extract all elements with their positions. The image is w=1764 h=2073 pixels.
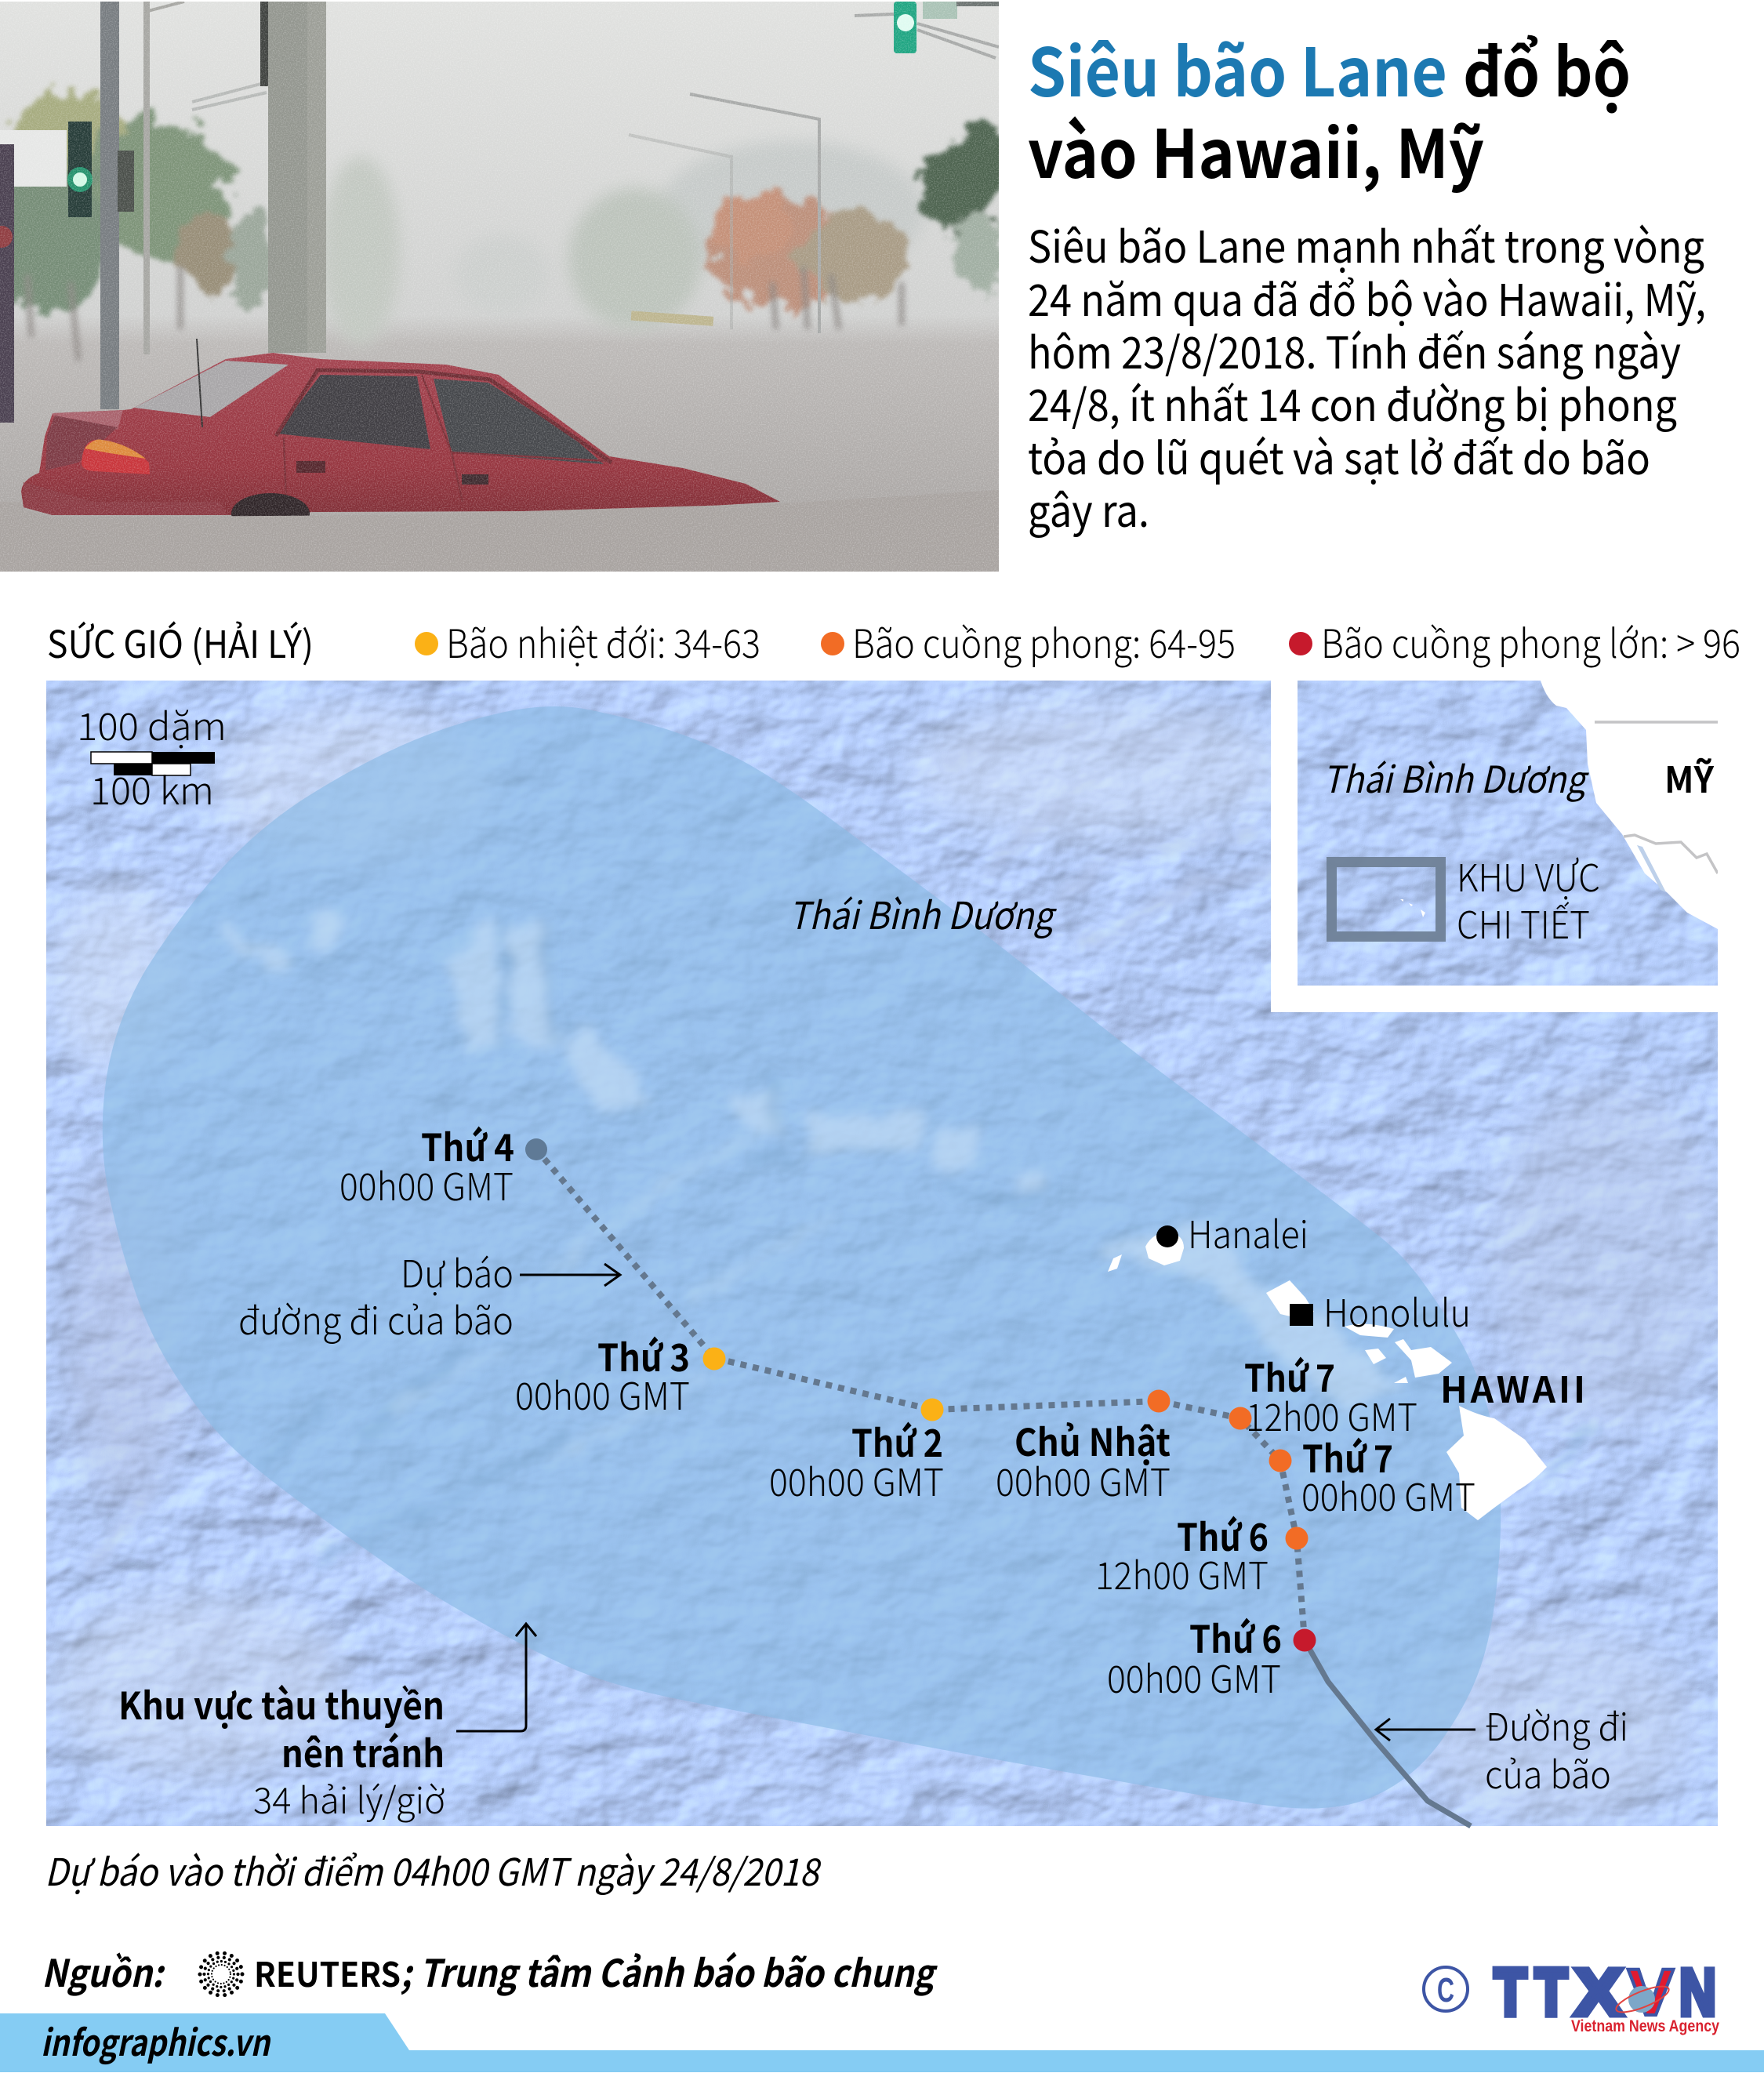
icon: copyright (1424, 1967, 1468, 2011)
wordmark letters: V (1628, 1955, 1674, 2029)
tree trunks (27, 267, 902, 361)
track point: Thứ 4 00h00 GMT (339, 1117, 547, 1211)
track point: Thứ 4 00h00 GMT: 00h00 GMT (339, 1156, 514, 1211)
track point: Thứ 7 12h00 GMT: 12h00 GMT (1246, 1387, 1417, 1442)
source line: ; Trung tâm Cảnh báo bão chung (401, 1943, 938, 1998)
tail light (82, 440, 150, 474)
rain grain (0, 2, 999, 572)
forecast time note: Dự báo vào thời điểm 04h00 GMT ngày 24/8/2018 (45, 1842, 822, 1897)
panel: locator inset map (1282, 665, 1733, 1001)
source line (42, 1943, 938, 1998)
title: vào Hawaii, Mỹ (1028, 101, 1484, 198)
intro text block: 24/8, ít nhất 14 con đường bị phong (1028, 371, 1677, 434)
street lights (192, 14, 999, 333)
callout: storm track: Đường đi (1485, 1697, 1628, 1752)
inset label: USA: MỸ (1664, 752, 1714, 804)
thin poles (143, 2, 150, 354)
intro text block: gây ra. (1028, 477, 1149, 540)
source line: Nguồn: (42, 1943, 165, 1998)
orange tree (710, 192, 909, 306)
callout: storm track: của bão (1485, 1744, 1611, 1799)
intro text block: tỏa do lũ quét và sạt lở đất do bão (1028, 424, 1650, 488)
callout: area ships should avoid (118, 1624, 536, 1824)
scale bar (77, 696, 227, 815)
ridge lines outside the cone (78, 706, 1270, 1701)
track point: Thứ 6 12h00 GMT (1095, 1507, 1308, 1600)
footer bar (0, 2013, 1764, 2072)
place: Hanalei: Hanalei (1188, 1204, 1308, 1259)
callout: forecast track: Dự báo (401, 1243, 514, 1298)
inset label: Pacific: Thái Bình Dương (1323, 750, 1589, 804)
main concrete pole (268, 2, 326, 353)
legend: wind strength (47, 613, 1740, 670)
dark tree at right (917, 125, 1007, 290)
Hawaiian islands (1108, 1233, 1547, 1520)
track point: Thứ 7 12h00 GMT (1229, 1348, 1417, 1442)
callout: area ships should avoid: 34 hải lý/giờ (253, 1773, 445, 1824)
wordmark letters (1494, 1955, 1716, 2029)
car (21, 339, 780, 534)
car windows (134, 361, 289, 417)
track point: Thứ 3 00h00 GMT: 00h00 GMT (515, 1366, 690, 1421)
callout: forecast track (238, 1243, 620, 1345)
left traffic light (68, 122, 92, 217)
legend item: typhoon: Bão cuồng phong: 64-95 (852, 613, 1236, 670)
wordmark letters: N (1679, 1955, 1716, 2029)
scale bar: 100 km (90, 761, 214, 815)
track point: Thứ 3 00h00 GMT (515, 1327, 726, 1421)
wheel (231, 493, 310, 534)
legend item: tropical storm: Bão nhiệt đới: 34-63 (446, 613, 760, 670)
seamount shallows and trenches (212, 909, 1596, 1560)
right traffic light (894, 2, 916, 53)
ocean relief background (31, 665, 1733, 1842)
label: Thái Bình Dương: Thái Bình Dương (789, 885, 1057, 940)
track point: Thứ 7 00h00 GMT: Thứ 7 (1302, 1429, 1393, 1483)
track point: Thứ 7 00h00 GMT: 00h00 GMT (1301, 1467, 1475, 1522)
Gulf of California (1637, 845, 1666, 892)
inset label: detail area: KHU VỰC (1457, 848, 1600, 902)
track point: Thứ 4 00h00 GMT: Thứ 4 (421, 1117, 514, 1172)
scale bar: 100 dặm (77, 696, 227, 751)
antenna (197, 339, 202, 427)
icon: globe (1613, 1981, 1671, 2017)
door handles (296, 461, 325, 473)
source line: REUTERS (254, 1948, 401, 1997)
track: forecast dotted line (536, 1149, 1305, 1640)
track point: Chủ Nhật 00h00 GMT: 00h00 GMT (996, 1452, 1171, 1507)
intro text block: hôm 23/8/2018. Tính đến sáng ngày (1028, 318, 1681, 382)
borders (1595, 722, 1718, 873)
place: Honolulu: Honolulu (1323, 1283, 1471, 1338)
panel: main map (31, 665, 1733, 1842)
callout: area ships should avoid: Khu vực tàu thuyền (118, 1675, 445, 1730)
intro text block: 24 năm qua đã đổ bộ vào Hawaii, Mỹ, (1028, 266, 1706, 329)
inset islands (1400, 899, 1425, 917)
detail area rectangle (1331, 862, 1441, 936)
track point: Thứ 2 00h00 GMT (769, 1399, 944, 1507)
logo: TTXVN: Vietnam News Agency (1571, 2017, 1719, 2035)
track point: Thứ 6 00h00 GMT (1107, 1609, 1316, 1704)
inset label: detail area: CHI TIẾT (1457, 895, 1590, 949)
callout: storm track (1376, 1697, 1628, 1799)
logo: TTXVN (1424, 1955, 1719, 2035)
callout: forecast track: đường đi của bão (238, 1291, 514, 1345)
track point: Chủ Nhật 00h00 GMT (996, 1389, 1171, 1507)
storm avoidance cone (103, 706, 1501, 1809)
intro text block (1028, 212, 1706, 540)
callout: area ships should avoid: nên tránh (281, 1723, 445, 1778)
inset label: detail area (1457, 848, 1600, 949)
wordmark letters: T (1494, 1955, 1526, 2029)
icon: copyright: C (1437, 1971, 1454, 2009)
icon: Reuters logo (200, 1953, 242, 1995)
label: HAWAII: HAWAII (1440, 1362, 1585, 1414)
title: đổ bộ (1463, 20, 1631, 116)
left trees (0, 90, 270, 314)
track point: Thứ 6 00h00 GMT: Thứ 6 (1189, 1609, 1282, 1664)
title (1028, 20, 1631, 198)
track point: Thứ 2 00h00 GMT: Thứ 2 (851, 1413, 943, 1468)
track point: Thứ 7 12h00 GMT: Thứ 7 (1244, 1348, 1335, 1403)
track point: Thứ 2 00h00 GMT: 00h00 GMT (769, 1452, 944, 1507)
track point: Thứ 6 12h00 GMT: Thứ 6 (1177, 1507, 1269, 1562)
title: Siêu bão Lane (1028, 20, 1447, 116)
track point: Thứ 6 12h00 GMT: 12h00 GMT (1095, 1545, 1269, 1600)
land: North America (1541, 681, 1718, 929)
road shoulder (631, 311, 713, 326)
legend: wind strength: SỨC GIÓ (HẢI LÝ) (47, 614, 314, 669)
photo: flooded street with submerged red car (0, 2, 1007, 572)
far misty trees (321, 141, 925, 345)
website label: infographics.vn (41, 2015, 271, 2067)
track point: Chủ Nhật 00h00 GMT: Chủ Nhật (1014, 1412, 1171, 1467)
track point: Thứ 7 00h00 GMT (1269, 1429, 1475, 1522)
track point: Thứ 6 00h00 GMT: 00h00 GMT (1107, 1649, 1281, 1704)
track: past path solid line (1305, 1640, 1471, 1826)
wordmark letters: X (1574, 1955, 1623, 2029)
water in front of car (0, 490, 999, 572)
wordmark letters: T (1535, 1955, 1567, 2029)
track point: Thứ 3 00h00 GMT: Thứ 3 (597, 1327, 690, 1382)
white building and dark post at left (0, 130, 67, 187)
intro text block: Siêu bão Lane mạnh nhất trong vòng (1028, 212, 1704, 276)
